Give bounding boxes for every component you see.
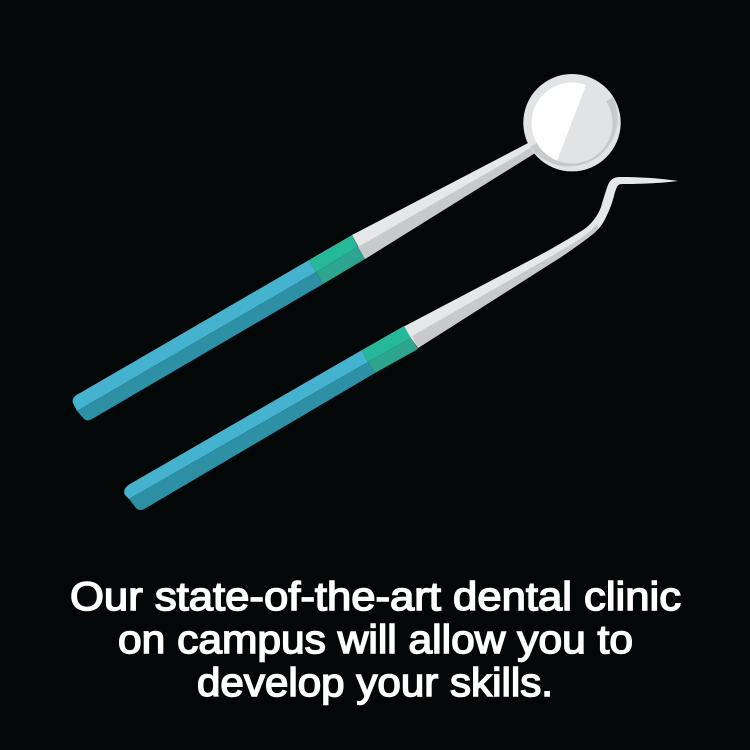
caption text: Our state-of-the-art dental clinic — [70, 575, 681, 619]
mirror head — [520, 70, 621, 171]
caption text: on campus will allow you to — [118, 618, 633, 662]
icon: dental probe — [124, 177, 678, 510]
caption text — [70, 575, 681, 705]
mirror green band — [309, 235, 365, 284]
infographic canvas — [71, 74, 681, 706]
probe shaft and hook — [403, 177, 678, 348]
mirror stem — [352, 142, 540, 259]
icon: dental mirror — [73, 70, 621, 420]
mirror blue handle — [73, 260, 323, 420]
probe green band — [362, 326, 418, 373]
probe blue handle — [124, 350, 375, 510]
caption text: develop your skills. — [197, 661, 553, 705]
